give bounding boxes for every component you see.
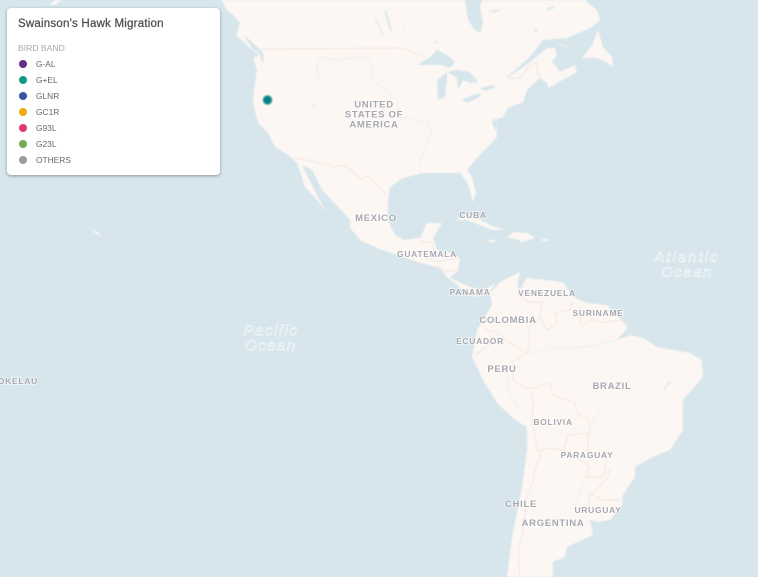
label: Atlantic Ocean: Atlantic: [653, 249, 720, 266]
legend panel: [7, 8, 220, 175]
lake: Winnipeg: [374, 10, 392, 37]
legend item: G23L: G23L: [36, 139, 56, 149]
small northern lakes: [403, 6, 555, 45]
lake: Erie: [462, 93, 482, 103]
legend heading: BIRD BAND: [18, 43, 65, 53]
label: Ecuador: ECUADOR: [456, 336, 504, 346]
Chesapeake: [492, 118, 497, 131]
label: Uruguay: URUGUAY: [574, 505, 622, 515]
label: Venezuela: VENEZUELA: [518, 288, 576, 298]
label: Argentina: ARGENTINA: [522, 518, 584, 529]
lake: Michigan: [437, 72, 447, 100]
legend title: Swainson's Hawk Migration: [18, 18, 164, 30]
land: Puerto Rico: [542, 239, 549, 241]
label: USA: STATES OF: [345, 110, 403, 120]
legend item: GLNR: [19, 91, 59, 101]
legend item: G93L: [19, 123, 56, 133]
lake: Superior: [417, 50, 455, 68]
label: Guatemala: GUATEMALA: [397, 249, 457, 259]
land: Hawaii: [92, 229, 100, 236]
legend item: G-AL: [19, 59, 56, 69]
land: South America: [472, 272, 703, 577]
label: Colombia: COLOMBIA: [479, 315, 537, 326]
sighting marker: [262, 94, 273, 106]
label: Chile: CHILE: [505, 499, 537, 510]
Puget strait: [243, 34, 264, 62]
label: Cuba: CUBA: [459, 210, 487, 220]
label: Pacific Ocean: Ocean: [245, 338, 297, 354]
legend item: GLNR: GLNR: [36, 91, 59, 101]
borders: [262, 48, 624, 577]
label: Bolivia: BOLIVIA: [533, 417, 573, 427]
label: Pacific Ocean: [244, 322, 298, 354]
land: Jamaica: [487, 240, 495, 242]
legend item: G23L: [19, 139, 56, 149]
label: USA: [345, 100, 403, 130]
rivers: [317, 57, 617, 505]
label: USA: AMERICA: [349, 120, 399, 130]
legend item: G+EL: G+EL: [36, 75, 58, 85]
label: Atlantic Ocean: [653, 249, 720, 281]
lakes: [243, 6, 673, 391]
Tocantins: [664, 381, 673, 391]
label: Pacific Ocean: Pacific: [244, 322, 298, 340]
lake: Huron: [447, 70, 478, 90]
legend item: OTHERS: OTHERS: [36, 155, 71, 165]
label: USA: UNITED: [354, 100, 394, 110]
land: North and Central America: [222, 0, 600, 297]
label: Suriname: SURINAME: [573, 308, 623, 318]
legend item: GC1R: GC1R: [36, 107, 59, 117]
lake: Great Salt: [311, 102, 316, 108]
legend item: GC1R: [19, 107, 59, 117]
legend item: G-AL: G-AL: [36, 59, 56, 69]
Maracaibo: [518, 282, 522, 288]
land: Anticosti: [556, 43, 570, 48]
label: Brazil: BRAZIL: [592, 381, 632, 392]
legend item: OTHERS: [19, 155, 71, 165]
label: Mexico: MEXICO: [355, 213, 397, 224]
label: Paraguay: PARAGUAY: [561, 450, 613, 460]
country and ocean labels: [0, 100, 720, 529]
land: Newfoundland: [582, 30, 613, 67]
land: Hispaniola: [507, 232, 535, 242]
label: Atlantic Ocean: Ocean: [661, 264, 713, 281]
legend item: G+EL: [19, 75, 58, 85]
lake: Ontario: [480, 85, 495, 91]
land: northwest fragment: [48, 0, 62, 5]
legend item: G93L: G93L: [36, 123, 56, 133]
label: Peru: PERU: [487, 364, 517, 375]
label: Panama: PANAMA: [450, 287, 490, 297]
land: Cuba: [455, 217, 505, 230]
